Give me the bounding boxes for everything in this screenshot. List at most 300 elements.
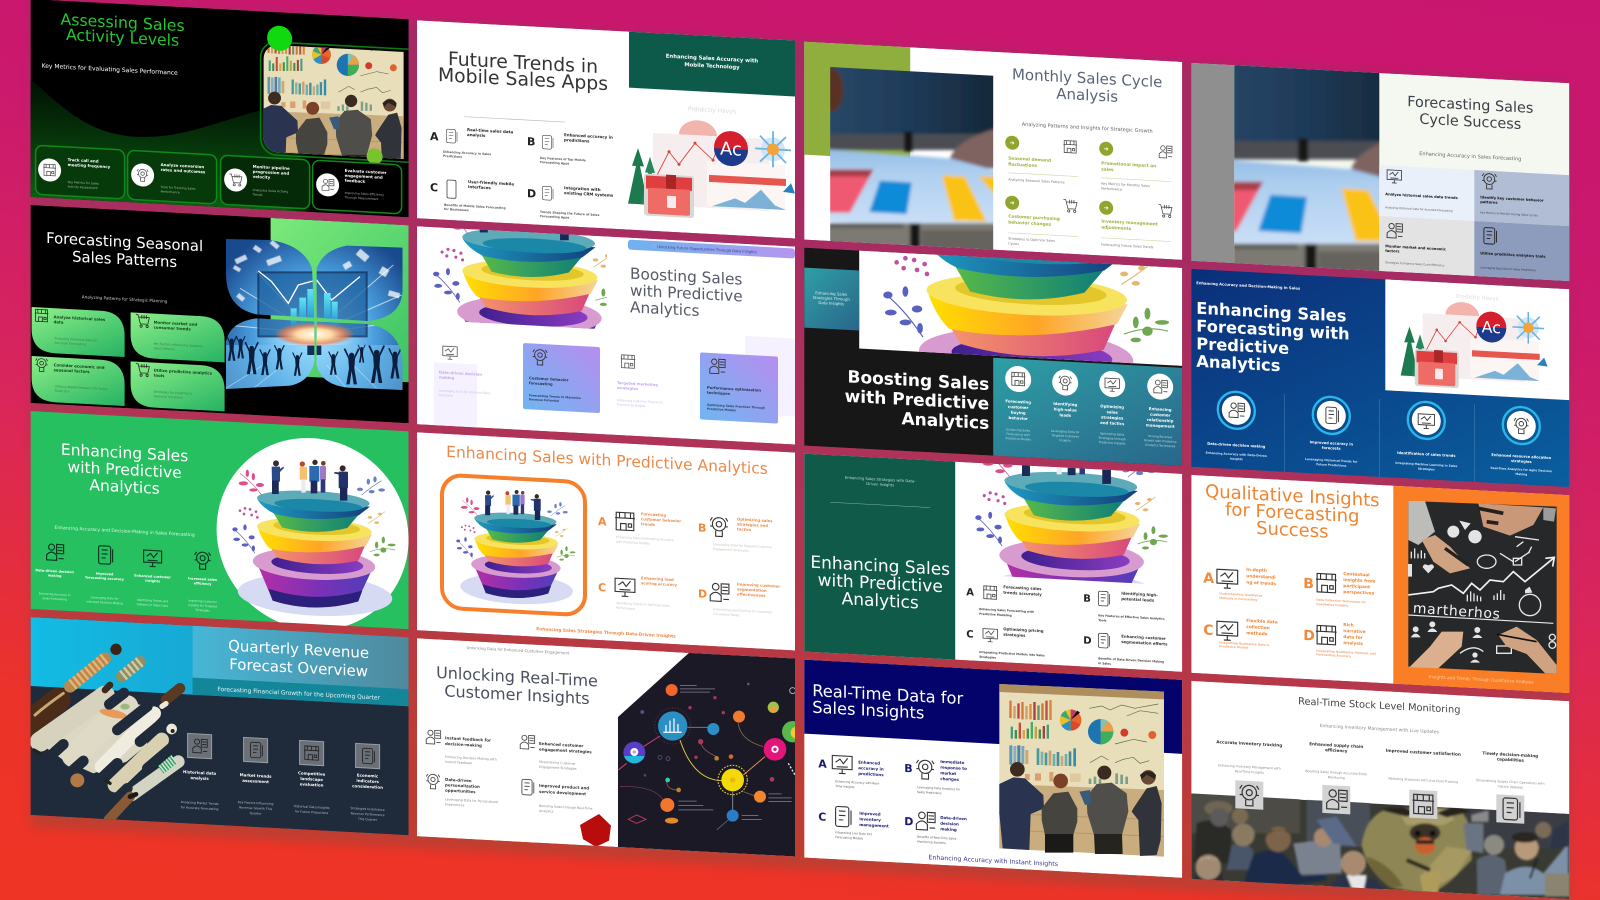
card: pipeline: progression and — [253, 169, 289, 176]
illustration frame — [442, 475, 585, 615]
column: decision making — [1476, 750, 1545, 825]
item D: Monitoring Systems — [917, 839, 946, 845]
item: data-driven: Leveraging Data for Informed Sales — [439, 388, 490, 395]
item: targeted marketing: Enhancing Customer Targets for — [617, 398, 663, 404]
item D: D — [1303, 628, 1315, 645]
column: satisfaction: Reducing Stockouts with Live Data Tracking — [1389, 776, 1458, 784]
item A: customer behavior — [641, 516, 681, 523]
card: track call: Track call and — [68, 157, 99, 164]
illustration: funnel — [883, 158, 1169, 468]
item A: analysis — [467, 132, 486, 138]
column: historical: Analyzing Market Trends — [181, 800, 218, 806]
illustration: dashboard — [1401, 299, 1548, 393]
column: optimizing: Optimizing — [1100, 403, 1124, 410]
photo: chalkboard — [1408, 501, 1557, 674]
column: accurate tracking: Accurate inventory tracking — [1216, 739, 1282, 748]
column: optimizing: and tactics — [1100, 420, 1125, 426]
card: engagement: Evaluate customer — [345, 168, 387, 175]
column: accurate tracking: Enhancing Inventory Management with — [1218, 763, 1281, 771]
item B: B — [698, 521, 706, 535]
grid cell: tools: Leveraging Big Data for Sales Predictions — [1480, 265, 1536, 272]
red heptagon — [580, 813, 611, 848]
card: tools: Strategies for Adapting to — [154, 390, 192, 396]
item C: C — [598, 581, 606, 594]
item C: Integrating Predictive Models into Sales — [979, 650, 1045, 657]
accent circle — [267, 25, 292, 51]
card: historical: Analyzing Historical Data for — [55, 336, 97, 343]
item C — [818, 805, 889, 842]
column: competitive: Historical Data Insights — [294, 804, 330, 810]
item: targeted marketing: Targeted marketing — [617, 381, 658, 387]
column: historical: Historical data — [183, 769, 216, 776]
item D — [1083, 632, 1168, 669]
card: customer behavior: Customer behavior — [529, 376, 569, 382]
item: promotional: ➜ — [1104, 146, 1109, 153]
item: purchasing: Strategies to Optimize Sales — [1008, 237, 1055, 243]
side tag: Strategies Through — [813, 295, 850, 302]
column: supply chain: Enhanced supply chain — [1309, 741, 1363, 749]
item C: Flexible data — [1246, 619, 1278, 626]
column: forecasting: Forecasting with — [1006, 432, 1030, 437]
column: forecasting accuracy: Informed Decision-Making — [86, 599, 123, 605]
item C: Enhancing lead — [641, 575, 674, 582]
item D: analysis — [1343, 640, 1363, 647]
illustration: funnel — [975, 425, 1168, 635]
card: pipeline: velocity — [253, 174, 271, 180]
card: conversion: Analyze conversion — [161, 162, 204, 169]
column: market trends: Key Factors Influencing — [238, 800, 273, 806]
heading: Enhancing Sales — [1196, 299, 1346, 326]
item C: scoring accuracy — [641, 580, 677, 587]
column: market trends — [238, 737, 274, 816]
item B — [904, 757, 967, 797]
column: forecasting — [1005, 365, 1031, 442]
white circle — [217, 433, 409, 635]
heading: Sales Patterns — [72, 249, 177, 271]
column: supply chain: efficiency — [1325, 747, 1348, 753]
heading: Predictive — [1196, 334, 1289, 358]
tag — [628, 240, 795, 259]
item A — [1203, 565, 1276, 603]
card: engagement — [313, 160, 402, 214]
column: sales efficiency: Insights for Targeted — [188, 603, 217, 608]
column: market trends: Quarter — [250, 811, 262, 816]
item C: C — [1203, 623, 1214, 639]
item D: making — [940, 826, 957, 832]
card: customer behavior: Revenue Potential — [529, 397, 559, 403]
item: promotional: sales — [1101, 166, 1114, 173]
item: engagement — [520, 735, 592, 772]
network illustration — [618, 649, 803, 857]
green header block: Enhancing Sales Accuracy with — [666, 54, 758, 65]
heading: Forecasting with — [1196, 316, 1350, 344]
item: personalization: Experiences — [445, 802, 465, 807]
item: targeted marketing: strategies — [617, 386, 639, 391]
card: performance: techniques — [707, 391, 731, 396]
column: relationship: Growth with Predictive — [1144, 438, 1177, 444]
green header block — [629, 32, 795, 97]
panel: Enhancing Sales with Predictive Analytics (orange) — [417, 432, 795, 651]
column: economic — [351, 743, 385, 822]
column: competitive — [294, 740, 330, 815]
panel: Future Trends in Mobile Sales Apps — [417, 20, 795, 239]
column: supply chain: Monitoring — [1328, 775, 1345, 780]
card: track call — [36, 145, 125, 199]
item C: Integrating Qualitative Data in — [1219, 640, 1269, 647]
item B: market — [940, 770, 956, 776]
caption: Enhancing Sales Strategies with Data- — [845, 476, 915, 484]
item B: Tools — [1098, 618, 1107, 623]
item B: Key Features of Top Mobile — [540, 156, 586, 162]
subtitle band: Forecasting Financial Growth for the Upcoming Quarter — [217, 687, 380, 702]
item D: existing CRM systems — [564, 190, 614, 198]
card: pipeline: Monitor pipeline — [253, 164, 290, 171]
item: purchasing — [1005, 195, 1078, 249]
subtitle: Key Metrics for Evaluating Sales Performance — [42, 63, 178, 77]
item: product development: Boosting Sales through Real-Time — [539, 804, 592, 811]
card: historical — [32, 307, 125, 357]
item B: B — [1083, 594, 1091, 605]
item C: interfaces — [468, 184, 491, 190]
card: performance: Performance optimization — [707, 386, 761, 393]
item D: Benefits of Real-Time Sales — [917, 835, 956, 841]
column: optimizing: strategies — [1101, 414, 1124, 421]
item C: C — [818, 810, 826, 824]
column: relationship — [1144, 373, 1177, 448]
card: customer behavior — [523, 343, 600, 413]
item: product development — [522, 779, 593, 816]
column: competitive: for Future Projections — [295, 809, 328, 815]
card: tools: Seasonal Variations — [154, 394, 183, 400]
item: product development: service development — [539, 789, 586, 796]
card: historical: Accurate Forecasting — [55, 341, 86, 346]
header block — [193, 626, 409, 689]
column: sales efficiency: Strategies — [195, 608, 210, 613]
column: competitive: Competitive — [298, 770, 325, 777]
heading: Forecast Overview — [229, 655, 368, 681]
column: customer insights: Identifying Trends and — [137, 598, 168, 603]
teal panel — [993, 358, 1182, 466]
subtitle band — [193, 678, 409, 706]
card: market: Sales Patterns — [154, 346, 175, 351]
item C: Predictive Models — [1219, 644, 1249, 650]
item A: A — [598, 515, 607, 528]
item D: decision — [940, 821, 959, 827]
column: trends — [1395, 400, 1458, 473]
photo: tablet — [830, 67, 994, 250]
illustration: dashboard — [628, 117, 795, 224]
item D: Conversion Rates — [713, 612, 740, 617]
item D: Forecasting Accuracy — [1316, 652, 1351, 658]
column: economic: indicators — [356, 778, 379, 784]
item: seasonal: ➜ — [1010, 140, 1015, 147]
item B: Enhanced accuracy in — [564, 132, 613, 140]
column: customer insights — [134, 550, 171, 608]
item D: segmentation efforts — [1121, 639, 1168, 647]
heading: Mobile Sales Apps — [438, 65, 608, 95]
item: instant feedback: Enhancing Decision-Making with — [445, 755, 497, 762]
heading: Enhancing Sales with Predictive Analytics — [446, 443, 768, 478]
item A: Real-time sales data — [467, 127, 513, 134]
item A: Predictions — [443, 154, 462, 159]
item B: tactics — [737, 526, 752, 532]
photo: tablet — [1234, 65, 1380, 271]
side tag: Enhancing Sales — [815, 290, 847, 297]
caption: Driven Insights — [866, 482, 894, 487]
card: engagement: feedback — [345, 178, 366, 184]
column: data-driven: Sales Forecasting — [42, 596, 67, 601]
item C: methods — [1246, 630, 1268, 637]
item D — [904, 811, 967, 846]
column: forecasting accuracy: forecasting accuracy — [85, 575, 125, 582]
item A: Predictive Modeling — [979, 612, 1012, 618]
grid cell: historical: Analyzing Historical Data for Accurate Forecasting — [1385, 205, 1453, 213]
column: market trends: assessment — [242, 778, 269, 784]
heading: with Predictive — [630, 282, 743, 306]
heading: for Forecasting — [1225, 499, 1359, 527]
column: historical: for Accurate Forecasting — [181, 805, 219, 811]
item: data-driven: Data-driven decision — [439, 370, 482, 377]
heading: Boosting Sales — [848, 367, 989, 395]
item D: D — [1083, 636, 1092, 647]
column: relationship: Enhancing — [1149, 406, 1172, 412]
item C: Identifying Trends to Optimize Sales — [616, 601, 670, 608]
item B: Identifying high- — [1121, 591, 1158, 598]
panel: Boosting Sales with Predictive Analytics (white) — [417, 181, 795, 445]
card: economic — [32, 356, 125, 406]
column: supply chain: Boosting Sales through Accurate Stock — [1305, 769, 1367, 776]
grid cell: historical — [1379, 165, 1474, 221]
card: performance: Predictive Models — [707, 407, 736, 412]
column: sales efficiency: Increased sales — [188, 576, 217, 582]
illustration background — [859, 251, 1182, 366]
item A — [966, 582, 1042, 619]
item C: User-friendly mobile — [468, 179, 514, 186]
subtitle: Enhancing Accuracy and Decision-Making in Sales Forecasting — [55, 525, 195, 538]
column: relationship: Driving Revenue — [1148, 434, 1172, 439]
item B: B — [1303, 576, 1314, 592]
accent circle — [367, 148, 383, 165]
heading: Sales Insights — [812, 698, 924, 723]
panel: Forecasting Sales Cycle Success — [1191, 62, 1570, 282]
column: forecasting accuracy: Improved — [96, 571, 113, 576]
grid cell: market: factors — [1385, 249, 1400, 254]
column: optimizing: Optimizing Sales — [1100, 431, 1124, 437]
item D: Integrating Qualitative Methods and — [1316, 649, 1376, 656]
item B: changes — [940, 776, 960, 782]
item: seasonal: fluctuations — [1008, 162, 1038, 169]
grid cell: behavior: Identify key customer behavior — [1480, 195, 1544, 203]
heading: Real-Time Stock Level Monitoring — [1298, 696, 1460, 716]
heading: Forecasting Sales — [1407, 94, 1533, 117]
item A: Methods in Forecasting — [1219, 596, 1258, 602]
caption: Unlocking Data for Enhanced Customer Engagement — [467, 645, 570, 655]
column: forecasting: behavior — [1009, 415, 1028, 421]
card: track call: Activity Assessment — [68, 184, 99, 190]
item: data-driven: making — [439, 375, 455, 380]
item A: Enhancing Sales Forecasting with — [979, 607, 1034, 614]
item: data-driven: Decisions — [439, 393, 453, 398]
heading: Forecasting Seasonal — [46, 230, 203, 255]
card: economic: Utilizing Market Research for Trend — [55, 384, 107, 391]
item C: inventory — [859, 816, 881, 822]
heading: Analytics — [1196, 352, 1280, 375]
item: engagement: engagement strategies — [539, 747, 592, 754]
card: customer behavior: Forecasting Trends to Maximize — [529, 393, 581, 400]
item B: Sales Predictions — [917, 790, 942, 795]
column: historical: analysis — [190, 775, 209, 781]
item D: D — [904, 815, 913, 828]
item C: Performance — [616, 606, 635, 611]
photo: team at chart board — [264, 46, 404, 159]
item A: A — [1203, 571, 1214, 587]
column: optimizing: Strategies through — [1099, 436, 1126, 441]
item: instant feedback — [426, 730, 497, 767]
item: data-driven — [439, 346, 491, 400]
item: personalization: Leveraging Data for Personalized — [445, 797, 498, 804]
heading: Monthly Sales Cycle — [1012, 65, 1162, 91]
item B: perspectives — [1343, 589, 1375, 597]
column: accuracy — [1305, 395, 1358, 468]
column: trends: Identification of sales trends — [1397, 451, 1455, 458]
subtitle: Enhancing Inventory Management with Live Updates — [1320, 723, 1440, 735]
item A: Time Insights — [834, 784, 855, 789]
column: accuracy: forecasts — [1322, 446, 1341, 451]
column: decision making: Instant Updates — [1498, 784, 1523, 790]
item A: trends — [641, 521, 656, 527]
footer: Enhancing Accuracy with Instant Insights — [928, 854, 1058, 868]
item: promotional: Key Metrics for Monthly Sales — [1101, 181, 1150, 188]
caption: Enhancing Accuracy and Decision-Making in Sales — [1196, 281, 1301, 291]
column: high value: Insights — [1060, 438, 1071, 443]
column: decision making: Streamlining Supply Chain Operations with — [1476, 778, 1545, 786]
item A — [818, 755, 884, 791]
grid cell: tools — [1474, 221, 1569, 281]
item B: predictions — [564, 137, 590, 144]
heading: Cycle Success — [1419, 112, 1521, 133]
item: purchasing: Customer purchasing — [1008, 215, 1060, 222]
card: economic: Prediction — [55, 389, 70, 394]
photo: team at chart board — [999, 675, 1164, 865]
faint caption: Prdidictiy Havys — [688, 106, 736, 115]
card: economic: seasonal factors — [54, 367, 90, 374]
item A: A — [430, 130, 439, 143]
item C: C — [430, 181, 438, 194]
card: tools — [131, 361, 225, 411]
item D: effectiveness — [737, 591, 766, 598]
item: instant feedback: Instant feedback for — [445, 735, 491, 743]
grid cell: market: Strategies to Improve Sales Cycle Efficiency — [1385, 260, 1445, 267]
panel: Quarterly Revenue Forecast Overview — [27, 617, 409, 840]
subtitle: Analyzing Patterns and Insights for Strategic Growth — [1022, 122, 1153, 135]
subtitle: Analyzing Patterns for Strategic Planning — [82, 294, 168, 304]
card: market: Monitor market and — [154, 320, 197, 327]
item: purchasing: ➜ — [1010, 200, 1015, 207]
column: decision making: capabilities — [1497, 756, 1524, 763]
item B: B — [527, 135, 535, 149]
item: seasonal — [1005, 135, 1078, 185]
item: instant feedback: Instant Feedback — [445, 760, 472, 765]
column: accurate tracking: Real-Time Insights — [1235, 769, 1264, 775]
item D: narrative — [1343, 628, 1366, 635]
heading: Analytics — [630, 298, 699, 320]
column: economic: This Quarter — [357, 817, 378, 822]
item B: Qualitative Insights — [1316, 602, 1349, 608]
column: forecasting: buying — [1011, 410, 1026, 415]
item C: Benefits of Mobile Sales Forecasting — [444, 203, 506, 210]
item B — [1303, 569, 1376, 609]
card: historical: Analyze historical sales — [54, 314, 105, 322]
item B: Optimizing sales — [737, 516, 773, 523]
card: pipeline: Analyzing Sales Activity — [253, 188, 288, 194]
heading: Quarterly Revenue — [228, 637, 369, 662]
item D: data for — [1343, 634, 1364, 641]
column: data-driven: making — [48, 573, 62, 578]
item B: Immediate — [940, 759, 964, 765]
heading: Analytics — [842, 589, 919, 613]
grid cell: historical: Analyze historical sales data trends — [1385, 192, 1458, 200]
card: track call: meeting frequency — [68, 162, 111, 169]
column: market trends: Market trends — [240, 772, 272, 779]
column: decision making: Timely decision-making — [1482, 750, 1538, 758]
card: historical: data — [54, 319, 64, 325]
heading: with Predictive — [68, 458, 182, 482]
item D: Rich — [1343, 623, 1354, 629]
item B: Data Collection Techniques for — [1316, 598, 1366, 604]
side tag: Data Insights — [818, 300, 844, 306]
panel: Real-Time Stock Level Monitoring — [1190, 681, 1570, 900]
image strips — [27, 644, 180, 820]
panel: Enhancing Sales with Predictive Analytics (green) — [31, 411, 409, 635]
item: engagement: Streamlining Customer — [539, 760, 576, 766]
panel: Forecasting Seasonal Sales Patterns — [31, 205, 410, 423]
illustration: chart butterfly — [220, 235, 410, 395]
card: tools: tools — [154, 373, 165, 378]
side tag — [804, 268, 859, 331]
card: track call: Key Metrics for Sales — [68, 180, 99, 186]
item C: collection — [1246, 624, 1270, 631]
card: conversion: rates and outcomes — [161, 167, 206, 174]
card: engagement: Through Measurement — [344, 195, 379, 201]
item: inventory: ➜ — [1104, 205, 1109, 212]
card: economic: Consider economic and — [54, 362, 105, 370]
item: promotional: Performance — [1101, 186, 1122, 192]
panel: Boosting Sales with Predictive Analytics (dark) — [804, 154, 1182, 469]
item D — [528, 186, 614, 219]
column: forecasting accuracy — [85, 545, 125, 606]
item: personalization: Data-driven — [445, 777, 472, 783]
column: resource: strategies — [1511, 459, 1532, 464]
item: inventory: Inventory management — [1101, 219, 1158, 228]
subtitle: Enhancing Accuracy in Sales Forecasting — [1419, 151, 1521, 163]
card: conversion — [128, 150, 217, 204]
column: data-driven: Enhancing Accuracy in — [39, 591, 70, 597]
card: pipeline — [221, 155, 310, 209]
column: resource — [1491, 405, 1552, 478]
column: high value: high-value — [1054, 406, 1077, 413]
item D — [698, 579, 780, 620]
column: customer insights: Patterns in Sales Data — [137, 602, 168, 608]
item: product development: Improved product and — [539, 783, 589, 791]
column: customer insights: Enhanced customer — [134, 574, 171, 580]
item C: Optimizing pricing — [1003, 626, 1044, 633]
column: relationship: customer — [1150, 412, 1171, 418]
column: customer insights: insights — [145, 579, 160, 583]
card: conversion: Tools for Tracking Sales — [161, 185, 195, 191]
column: data-driven: Data-driven decision — [35, 568, 74, 574]
column: historical — [181, 733, 219, 811]
item A — [598, 509, 681, 547]
